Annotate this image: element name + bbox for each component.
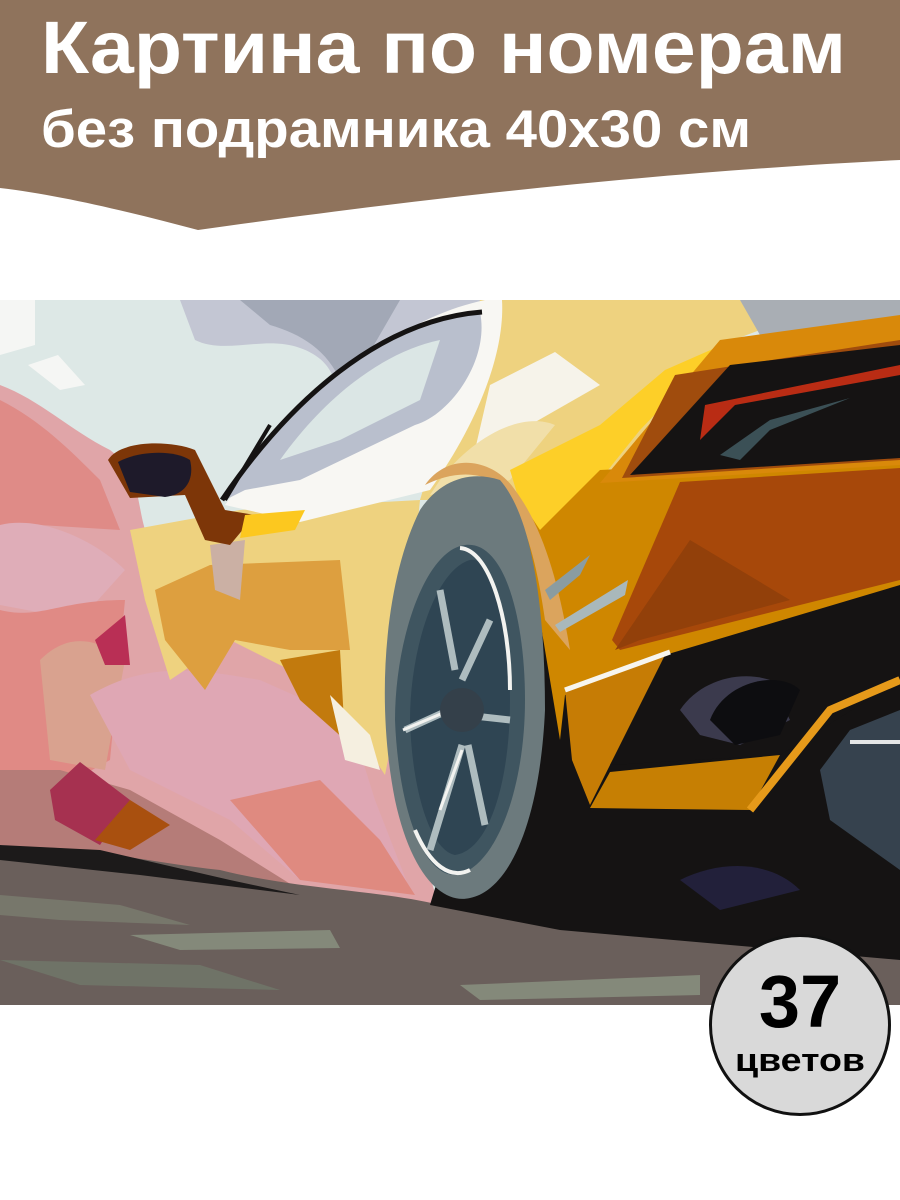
car rear body <box>130 500 420 775</box>
subtitle: без подрамника 40х30 см <box>41 100 751 159</box>
badge: 37 colours <box>710 936 890 1114</box>
windshield <box>222 312 482 500</box>
ground <box>0 845 900 1005</box>
sky and smoke background <box>0 300 760 890</box>
badge label: цветов <box>735 1042 865 1078</box>
front wheel <box>385 463 570 899</box>
wing mirror <box>108 443 305 545</box>
front bumper and air intake <box>565 585 900 910</box>
header banner <box>0 0 900 230</box>
pink smoke <box>0 385 440 910</box>
front quarter panel <box>520 315 900 740</box>
car cabin and hood <box>225 300 900 530</box>
side vents <box>545 555 628 632</box>
badge number: 37 <box>759 960 841 1043</box>
dark lower front <box>430 632 900 960</box>
painting: yellow car drifting in pink smoke <box>0 300 900 1005</box>
title: Картина по номерам <box>41 6 846 89</box>
